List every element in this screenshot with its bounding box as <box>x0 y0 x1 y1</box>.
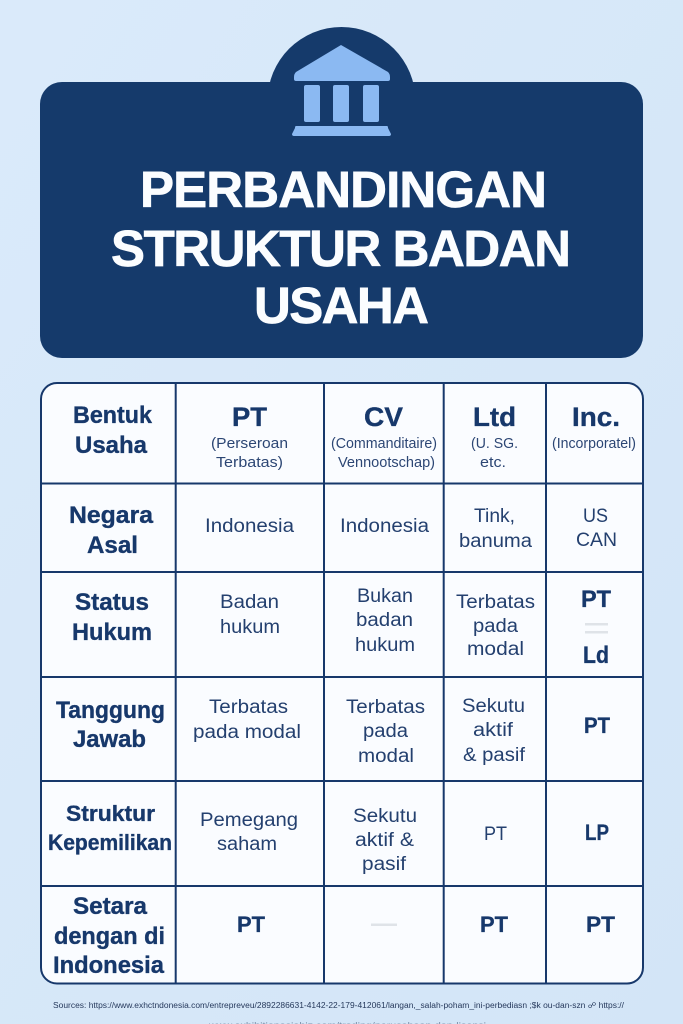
row label: Setara dengan di Indonesia: dengan di <box>54 923 165 950</box>
cell: Ltd status <box>456 592 535 660</box>
cell: PT tanggung jawab: Terbatas <box>209 697 288 718</box>
row label: Negara Asal <box>69 502 154 559</box>
cell: PT kepemilikan <box>200 810 298 855</box>
cell: PT status <box>220 592 280 638</box>
cell: CV status: hukum <box>355 635 415 656</box>
cell: Inc kepemilikan: LP <box>585 820 609 845</box>
cell: Ltd tanggung jawab <box>462 696 526 766</box>
column header: Ltd: etc. <box>480 454 506 471</box>
row label: Negara Asal: Negara <box>69 502 154 529</box>
row label: Bentuk Usaha: Bentuk <box>73 402 153 429</box>
cell: CV status <box>355 586 415 656</box>
row label: Status Hukum: Hukum <box>72 619 152 646</box>
row label: Setara dengan di Indonesia: Indonesia <box>53 952 165 979</box>
cell: CV kepemilikan: Sekutu <box>353 806 417 827</box>
column header: PT: Terbatas) <box>216 454 283 471</box>
cell: PT kepemilikan: Pemegang <box>200 810 298 831</box>
cell: CV negara: Indonesia <box>340 516 429 537</box>
row label: Bentuk Usaha <box>73 402 153 459</box>
column header: CV <box>331 402 437 471</box>
row label: Status Hukum <box>72 589 152 646</box>
cell: CV setara dash <box>371 924 397 926</box>
row label: Setara dengan di Indonesia <box>53 893 165 979</box>
cell: Ltd setara: PT <box>480 912 509 937</box>
cell: Ltd status: modal <box>467 639 524 660</box>
title: USAHA <box>254 277 429 334</box>
cell: Ltd negara <box>459 506 532 552</box>
row label: Struktur Kepemilikan: Struktur <box>66 801 155 826</box>
cell: Ltd status: Terbatas <box>456 592 535 613</box>
row label: Struktur Kepemilikan: Kepemilikan <box>48 830 172 855</box>
cell: Inc negara <box>576 506 617 551</box>
row label: Bentuk Usaha: Usaha <box>75 432 148 459</box>
cell: PT kepemilikan: saham <box>217 834 277 855</box>
cell: Ltd tanggung jawab: Sekutu <box>462 696 525 717</box>
column header: CV: (Commanditaire) <box>331 435 437 452</box>
cell: PT tanggung jawab <box>193 697 301 743</box>
cell: Inc status: Ld <box>583 642 609 669</box>
cell: Inc negara: US <box>583 506 608 527</box>
row label: Tanggung Jawab: Tanggung <box>56 697 165 724</box>
cell: CV kepemilikan: pasif <box>362 854 407 875</box>
title: PERBANDINGAN <box>140 161 547 218</box>
column header: Ltd: Ltd <box>473 402 516 432</box>
column header: CV: Vennootschap) <box>338 454 435 471</box>
cell: Inc negara: CAN <box>576 530 617 551</box>
cell: CV tanggung jawab: Terbatas <box>346 697 425 718</box>
row label: Struktur Kepemilikan <box>48 801 172 855</box>
row label: Status Hukum: Status <box>75 589 149 616</box>
cell: Inc tanggung jawab: PT <box>584 713 611 738</box>
cell: PT tanggung jawab: pada modal <box>193 722 301 743</box>
title: STRUKTUR BADAN <box>111 220 571 277</box>
cell: CV kepemilikan <box>353 806 417 875</box>
column header: Inc.: (Incorporatel) <box>552 435 636 452</box>
cell: CV status: badan <box>356 610 413 631</box>
header panel <box>40 27 643 358</box>
cell: CV status: Bukan <box>357 586 413 607</box>
row label: Negara Asal: Asal <box>87 532 138 559</box>
cell: PT negara: Indonesia <box>205 516 294 537</box>
cell: Ltd negara: Tink, <box>474 506 515 527</box>
cell: Ltd negara: banuma <box>459 531 532 552</box>
cell: Inc status: PT <box>581 586 611 613</box>
row label: Setara dengan di Indonesia: Setara <box>73 893 148 920</box>
cell: CV kepemilikan: aktif & <box>355 830 414 851</box>
icon: bank building <box>292 45 391 136</box>
cell: Inc status <box>581 586 611 669</box>
column header: PT: (Perseroan <box>211 435 288 452</box>
title <box>111 161 571 334</box>
row label: Tanggung Jawab: Jawab <box>73 726 146 753</box>
cell: Ltd tanggung jawab: aktif <box>473 720 514 741</box>
row label: Tanggung Jawab <box>56 697 165 753</box>
column header: Ltd: (U. SG. <box>471 435 518 452</box>
cell: PT setara: PT <box>237 912 266 937</box>
cell: PT status: Badan <box>220 592 279 613</box>
column header: Inc. <box>552 402 636 452</box>
column header: PT: PT <box>232 402 268 432</box>
column header: Ltd <box>471 402 518 471</box>
cell: CV tanggung jawab <box>346 697 425 767</box>
cell: Ltd kepemilikan: PT <box>484 824 507 845</box>
cell: Ltd tanggung jawab: & pasif <box>463 745 526 766</box>
cell: PT status: hukum <box>220 617 280 638</box>
column header: Inc.: Inc. <box>572 402 620 432</box>
cell: Inc setara: PT <box>586 912 616 937</box>
sources footer: Sources: https://www.exhctndonesia.com/entrepreveu/2892286631-4142-22-179-412061/langan,_salah-poham_ini-perbediasn ;$k ou-dan-szn ☍ https:// <box>53 1001 625 1010</box>
cell: Ltd status: pada <box>473 616 518 637</box>
cell: CV tanggung jawab: pada <box>363 721 408 742</box>
comparison table panel <box>41 383 643 984</box>
cell: CV tanggung jawab: modal <box>358 746 414 767</box>
column header: PT <box>211 402 288 471</box>
column header: CV: CV <box>364 402 403 432</box>
sources footer <box>53 1001 625 1024</box>
